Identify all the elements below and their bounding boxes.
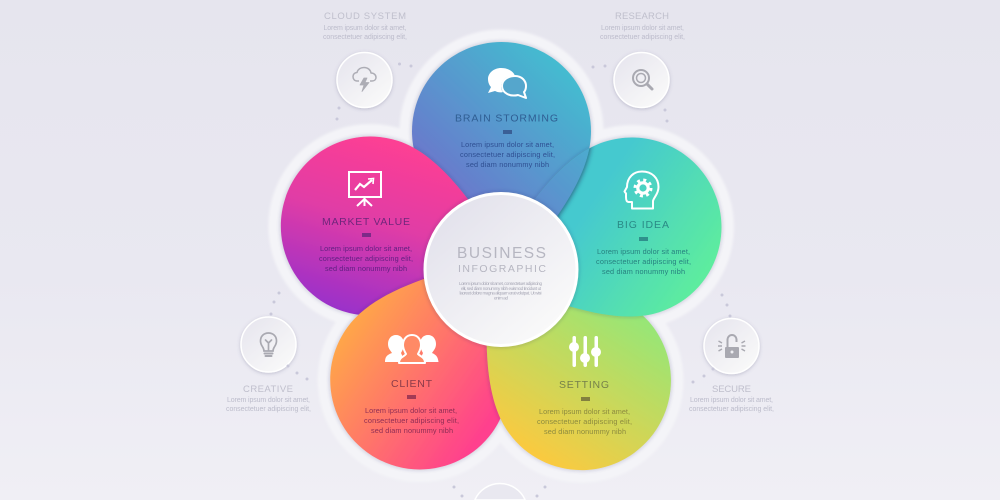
icon: people group — [385, 335, 438, 363]
body text — [537, 407, 632, 436]
button circle — [614, 52, 669, 108]
panel: market value content — [319, 172, 413, 273]
icon: presentation board — [349, 172, 381, 206]
petal: brain storming — [412, 42, 591, 285]
satellite: bottom button — [475, 484, 525, 500]
satellite: cloud system — [323, 11, 407, 108]
body text — [319, 244, 413, 273]
petal: big idea — [458, 114, 745, 360]
heading: setting: SETTING — [559, 379, 609, 391]
body text: Lorem ipsum dolor sit amet, — [461, 140, 554, 149]
panel: client content — [364, 335, 459, 435]
petal halo — [258, 42, 745, 500]
body text: consectetuer adipiscing elit, — [537, 417, 632, 426]
text — [600, 25, 685, 41]
panel: center circle — [425, 194, 577, 346]
text: consectetuer adipiscing elit, — [600, 34, 685, 41]
satellite: research — [600, 11, 685, 108]
satellite: creative — [226, 317, 311, 413]
center title: BUSINESS — [457, 245, 546, 262]
panel: big idea content — [596, 172, 691, 276]
body text — [364, 406, 459, 435]
petal: setting — [419, 204, 706, 500]
body text: Lorem ipsum dolor sit amet, — [597, 247, 690, 256]
icon: light bulb — [260, 333, 276, 356]
icon: head with gear — [624, 172, 658, 208]
divider bar — [407, 395, 416, 399]
body text: Lorem ipsum dolor sit amet, — [365, 406, 457, 415]
button circle — [704, 318, 759, 374]
text: Lorem ipsum dolor sit amet, — [601, 25, 684, 32]
text — [689, 397, 774, 413]
petal: client — [295, 203, 582, 500]
heading: client: CLIENT — [391, 378, 433, 390]
body text: sed diam nonummy nibh — [466, 160, 549, 169]
center body text: laoreet dolore magna aliquam erat volutpat. Ut wisi — [460, 290, 542, 296]
heading: brain storming: BRAIN STORMING — [455, 113, 558, 125]
body text: sed diam nonummy nibh — [544, 427, 626, 436]
body text: consectetuer adipiscing elit, — [364, 416, 459, 425]
text: Lorem ipsum dolor sit amet, — [324, 25, 407, 32]
body text: consectetuer adipiscing elit, — [460, 150, 555, 159]
body text: consectetuer adipiscing elit, — [596, 257, 691, 266]
body text: Lorem ipsum dolor sit amet, — [320, 244, 412, 253]
body text: consectetuer adipiscing elit, — [319, 254, 413, 263]
text: Lorem ipsum dolor sit amet, — [690, 397, 773, 404]
icon: sliders — [569, 336, 601, 367]
button circle — [337, 52, 392, 108]
text: Lorem ipsum dolor sit amet, — [227, 397, 310, 404]
text: consectetuer adipiscing elit, — [226, 406, 311, 413]
body text: sed diam nonummy nibh — [371, 426, 453, 435]
button circle — [241, 317, 296, 372]
text — [323, 25, 407, 41]
heading: SECURE — [712, 384, 751, 395]
heading: CREATIVE — [243, 384, 293, 395]
body text — [460, 140, 555, 169]
body text — [596, 247, 691, 276]
icon: open lock — [718, 335, 746, 358]
panel: setting content — [537, 336, 632, 436]
petal: market value — [258, 113, 544, 359]
center body text: enim ad — [494, 296, 508, 300]
body text: sed diam nonummy nibh — [325, 264, 407, 273]
heading: CLOUD SYSTEM — [324, 11, 406, 22]
icon: storm cloud — [353, 68, 376, 92]
divider bar — [503, 130, 512, 134]
petal: brain storming overlap on big idea — [534, 146, 594, 220]
icon: speech bubbles — [488, 68, 526, 98]
text: consectetuer adipiscing elit, — [689, 406, 774, 413]
body text: Lorem ipsum dolor sit amet, — [539, 407, 630, 416]
divider bar — [639, 237, 648, 241]
body text: sed diam nonummy nibh — [602, 267, 685, 276]
connector dots — [270, 62, 732, 498]
divider bar — [362, 233, 371, 237]
center subtitle: INFOGRAPHIC — [458, 263, 546, 275]
center body text: elit, sed diam nonummy nibh euismod tincidunt ut — [461, 286, 542, 291]
center body text — [459, 281, 542, 300]
divider bar — [581, 397, 590, 401]
text: consectetuer adipiscing elit, — [323, 34, 407, 41]
panel: brain storming content — [455, 68, 558, 169]
satellite: secure — [689, 318, 774, 413]
center body text: Lorem ipsum dolor sit amet, consectetuer adipiscing — [459, 281, 542, 286]
heading: RESEARCH — [615, 11, 669, 22]
icon: magnifier — [633, 70, 652, 89]
text — [226, 397, 311, 413]
heading: big idea: BIG IDEA — [617, 219, 669, 231]
heading: market value: MARKET VALUE — [322, 216, 410, 228]
